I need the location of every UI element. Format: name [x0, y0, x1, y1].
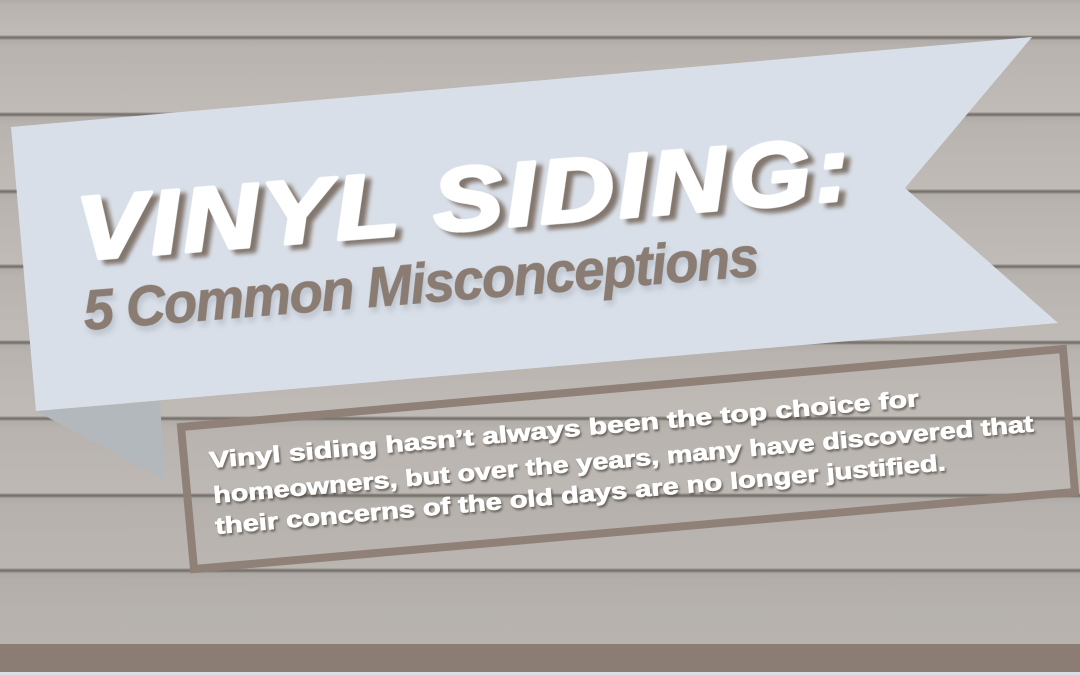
bottom band	[0, 644, 1080, 672]
banner fold tail	[36, 401, 165, 480]
intro line 3: their concerns of the old days are no longer justified.	[214, 449, 947, 539]
intro paragraph	[208, 385, 1035, 539]
intro line 1: Vinyl siding hasn’t always been the top choice for	[208, 385, 920, 473]
subtitle: 5 Common Misconceptions	[81, 225, 760, 343]
intro line 2: homeowners, but over the years, many have discovered that	[212, 410, 1035, 508]
banner ribbon	[11, 37, 1058, 411]
title: VINYL SIDING:	[73, 119, 856, 280]
text frame	[181, 349, 1075, 569]
